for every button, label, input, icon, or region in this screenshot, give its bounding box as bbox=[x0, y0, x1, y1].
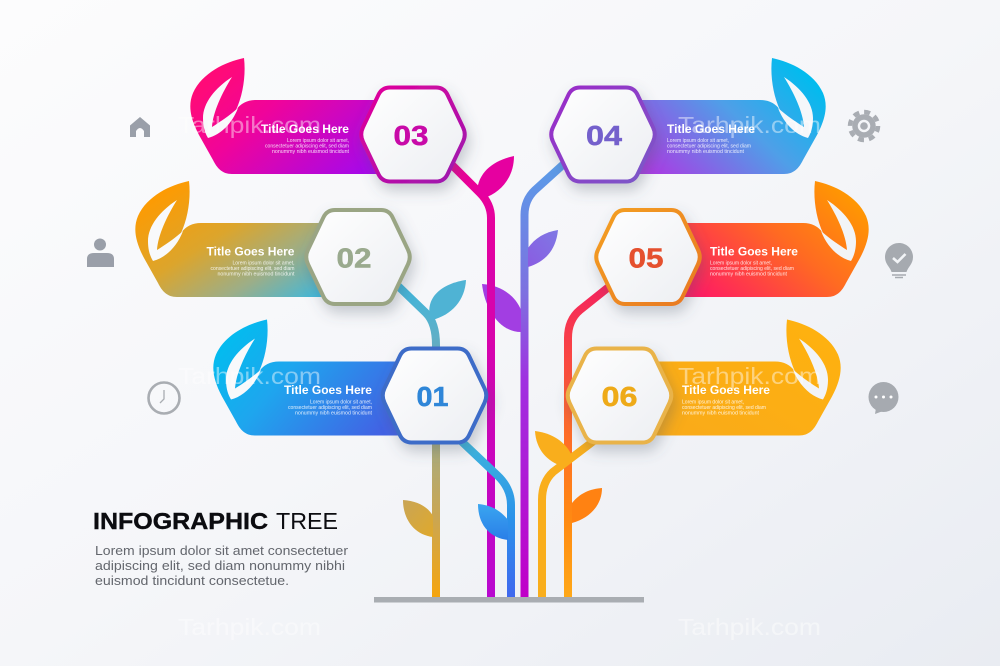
banner shape 05 bbox=[674, 181, 869, 297]
icon: gear bbox=[850, 112, 878, 140]
text block 06: Title Goes Here bbox=[682, 385, 770, 397]
number 06: 06 bbox=[602, 381, 638, 412]
text block 01 bbox=[284, 385, 373, 416]
stem: 05 bbox=[568, 286, 610, 597]
ground line bbox=[374, 597, 644, 602]
hexagon 01 bbox=[383, 348, 486, 442]
hexagon 02 bbox=[306, 210, 410, 304]
text block 03: consectetuer adipiscing elit, sed diam bbox=[265, 144, 350, 150]
purple leaf behind stems bbox=[482, 284, 521, 332]
leaf vein 02 bbox=[148, 200, 183, 261]
leaf: violet bbox=[528, 230, 558, 267]
tree stems bbox=[450, 162, 566, 597]
text block 04: Title Goes Here bbox=[667, 124, 755, 136]
hexagon 03 bbox=[361, 88, 465, 182]
hexagon 05 bbox=[596, 210, 700, 304]
text block 02 bbox=[206, 246, 295, 278]
stem: 03 bbox=[450, 163, 491, 597]
text block 02: Lorem ipsum dolor sit amet, bbox=[232, 260, 294, 266]
text block 06: Lorem ipsum dolor sit amet, bbox=[682, 400, 744, 406]
leaf: teal bbox=[429, 280, 466, 320]
banner shape 04 bbox=[631, 58, 826, 174]
panel: banner 02 bbox=[135, 181, 330, 297]
watermarks: Tarhpik.com bbox=[678, 614, 821, 640]
leaf: magenta bbox=[477, 156, 514, 198]
icon: clock bbox=[148, 382, 180, 414]
number 05: 05 bbox=[628, 242, 664, 274]
number 01: 01 bbox=[416, 381, 448, 412]
number 04: 04 bbox=[586, 120, 622, 151]
leaf vein 03 bbox=[203, 77, 238, 138]
leaf: orange bbox=[572, 488, 602, 523]
text block 05: Title Goes Here bbox=[710, 246, 798, 258]
watermarks: Tarhpik.com bbox=[178, 363, 321, 389]
panel: banner 06 bbox=[646, 320, 841, 436]
watermarks: Tarhpik.com bbox=[678, 363, 821, 389]
icon: person bbox=[87, 238, 114, 267]
text block 02: Title Goes Here bbox=[206, 246, 294, 258]
leaf: blue bbox=[478, 504, 508, 540]
hexagon 04 bbox=[551, 88, 655, 182]
text block: description: Lorem ipsum dolor sit amet consectetuer bbox=[95, 543, 349, 558]
number 03: 03 bbox=[394, 120, 428, 151]
text block 04 bbox=[667, 124, 755, 155]
icon: chat bubble bbox=[868, 382, 898, 414]
text block 05 bbox=[710, 246, 798, 278]
leaf vein 04 bbox=[778, 77, 813, 138]
title bbox=[93, 508, 338, 534]
banner shape 01 bbox=[213, 320, 408, 436]
text block 02: consectetuer adipiscing elit, sed diam bbox=[210, 266, 295, 272]
text block: description bbox=[95, 543, 349, 588]
stem leaves bbox=[403, 156, 602, 540]
text block 04: nonummy nibh euismod tincidunt bbox=[667, 149, 745, 155]
panel: banner 03 bbox=[190, 58, 385, 174]
text block 03: Title Goes Here bbox=[261, 124, 349, 136]
panel: banner 05 bbox=[674, 181, 869, 297]
leaf: gold bbox=[403, 500, 433, 537]
text block 01: Title Goes Here bbox=[284, 385, 372, 397]
text block 02: nonummy nibh euismod tincidunt bbox=[218, 272, 295, 278]
text block 05: nonummy nibh euismod tincidunt bbox=[710, 272, 788, 278]
watermarks: Tarhpik.com bbox=[178, 112, 321, 138]
leaf vein 06 bbox=[793, 338, 828, 400]
banner shape 02 bbox=[135, 181, 330, 297]
stem: 02 bbox=[397, 285, 436, 360]
watermarks: Tarhpik.com bbox=[678, 112, 821, 138]
text block 06 bbox=[682, 385, 770, 416]
title: TREE bbox=[276, 508, 338, 534]
leaf vein 05 bbox=[821, 200, 856, 261]
text block 03 bbox=[261, 124, 350, 155]
text block 05: consectetuer adipiscing elit, sed diam bbox=[710, 266, 795, 272]
text block 05: Lorem ipsum dolor sit amet, bbox=[710, 260, 772, 266]
text block 01: nonummy nibh euismod tincidunt bbox=[295, 410, 373, 416]
hexagon 06 bbox=[568, 348, 671, 442]
stem: 06 bbox=[542, 440, 595, 597]
icon: house bbox=[130, 117, 150, 137]
watermarks: Tarhpik.com bbox=[178, 614, 321, 640]
text block 04: Lorem ipsum dolor sit amet, bbox=[667, 138, 729, 144]
title: INFOGRAPHIC bbox=[93, 508, 268, 534]
text block 06: consectetuer adipiscing elit, sed diam bbox=[682, 405, 767, 411]
stem: 02 lower bbox=[432, 440, 440, 597]
text block: description: adipiscing elit, sed diam nonummy nibhi bbox=[95, 558, 345, 573]
text block 03: Lorem ipsum dolor sit amet, bbox=[287, 138, 349, 144]
icon: light bulb with check bbox=[885, 243, 913, 278]
redraw of stem 03 over purple leaf bbox=[487, 270, 495, 345]
lower stems bbox=[397, 285, 610, 597]
text block 06: nonummy nibh euismod tincidunt bbox=[682, 410, 760, 416]
text block 03: nonummy nibh euismod tincidunt bbox=[272, 149, 350, 155]
text block: description: euismod tincidunt consectetue. bbox=[95, 573, 289, 588]
stem: 04 bbox=[524, 162, 566, 597]
leaf vein 01 bbox=[226, 338, 261, 400]
number 02: 02 bbox=[336, 242, 372, 274]
panel: banner 01 bbox=[213, 320, 408, 436]
text block 04: consectetuer adipiscing elit, sed diam bbox=[667, 144, 752, 150]
leaf: amber bbox=[535, 431, 572, 466]
text block 01: Lorem ipsum dolor sit amet, bbox=[310, 400, 372, 406]
banner shape 03 bbox=[190, 58, 385, 174]
stem: 01 bbox=[460, 440, 511, 597]
watermarks bbox=[178, 112, 821, 640]
panel: banner 04 bbox=[631, 58, 826, 174]
text block 01: consectetuer adipiscing elit, sed diam bbox=[288, 405, 373, 411]
banner shape 06 bbox=[646, 320, 841, 436]
